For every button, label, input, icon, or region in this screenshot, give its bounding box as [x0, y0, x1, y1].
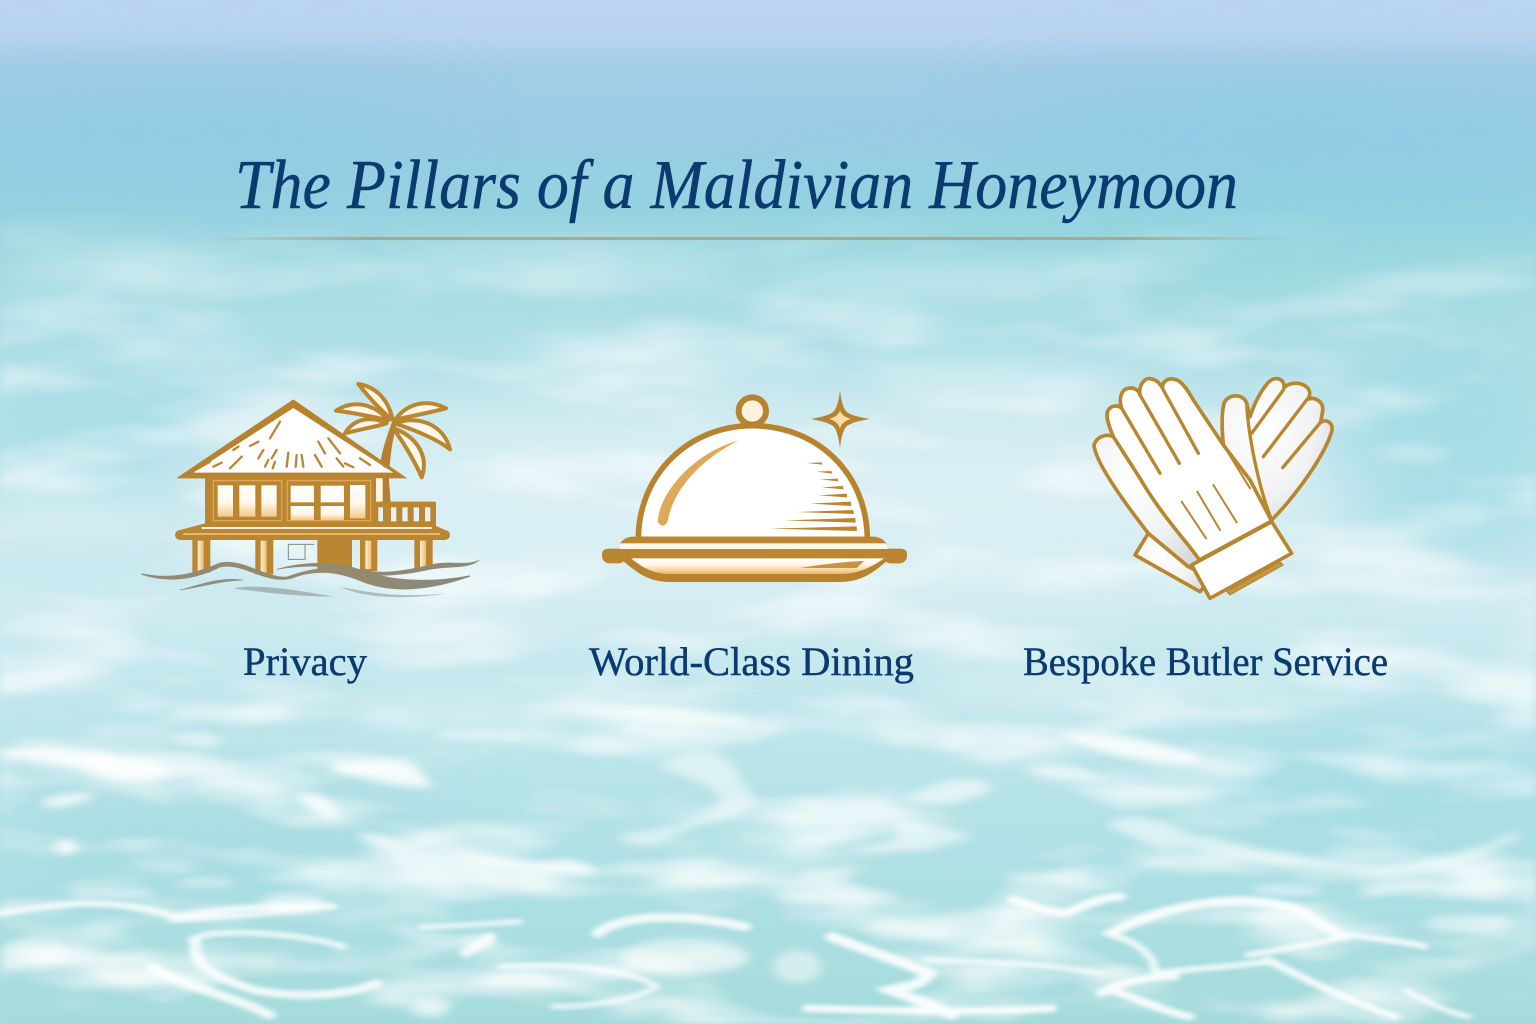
pillar: privacy [142, 384, 479, 684]
pillar: world-class dining [589, 391, 914, 684]
icon: overwater bungalow with palm [142, 384, 479, 597]
icon: dining cloche with sparkle [602, 391, 907, 582]
behind finger [1094, 435, 1202, 567]
label: privacy: Privacy [243, 639, 367, 684]
label: bespoke butler service: Bespoke Butler Service [1023, 639, 1388, 684]
back glove cuff [1135, 533, 1212, 592]
front cuff [1192, 522, 1292, 598]
dome rim [619, 537, 887, 549]
back glove [1222, 379, 1332, 520]
cuff shadow [1227, 562, 1283, 595]
title rule [205, 237, 1290, 240]
cloche dome [638, 426, 867, 539]
dome highlight [658, 441, 738, 526]
deck platform [175, 523, 450, 540]
tray [602, 549, 907, 582]
palm tree [336, 384, 450, 503]
icon: white butler gloves [1094, 379, 1332, 598]
title: The Pillars of a Maldivian Honeymoon [235, 147, 1238, 224]
lower caustics left, mapped from crop coordinates [0, 705, 754, 1017]
thatched roof [176, 399, 407, 478]
front glove [1107, 379, 1272, 560]
dome shading lines [770, 462, 857, 531]
label: world-class dining: World-Class Dining [589, 639, 914, 684]
cloche knob [739, 397, 766, 425]
stilts and door [192, 539, 433, 574]
pillar: bespoke butler service [1023, 379, 1388, 684]
sparkle [811, 391, 870, 448]
waves [142, 560, 479, 597]
house walls and windows [205, 477, 383, 527]
water streak texture [0, 226, 1536, 1024]
lower caustics right, mapped from crop coordinates [773, 733, 1518, 1017]
deck railing [375, 502, 436, 527]
